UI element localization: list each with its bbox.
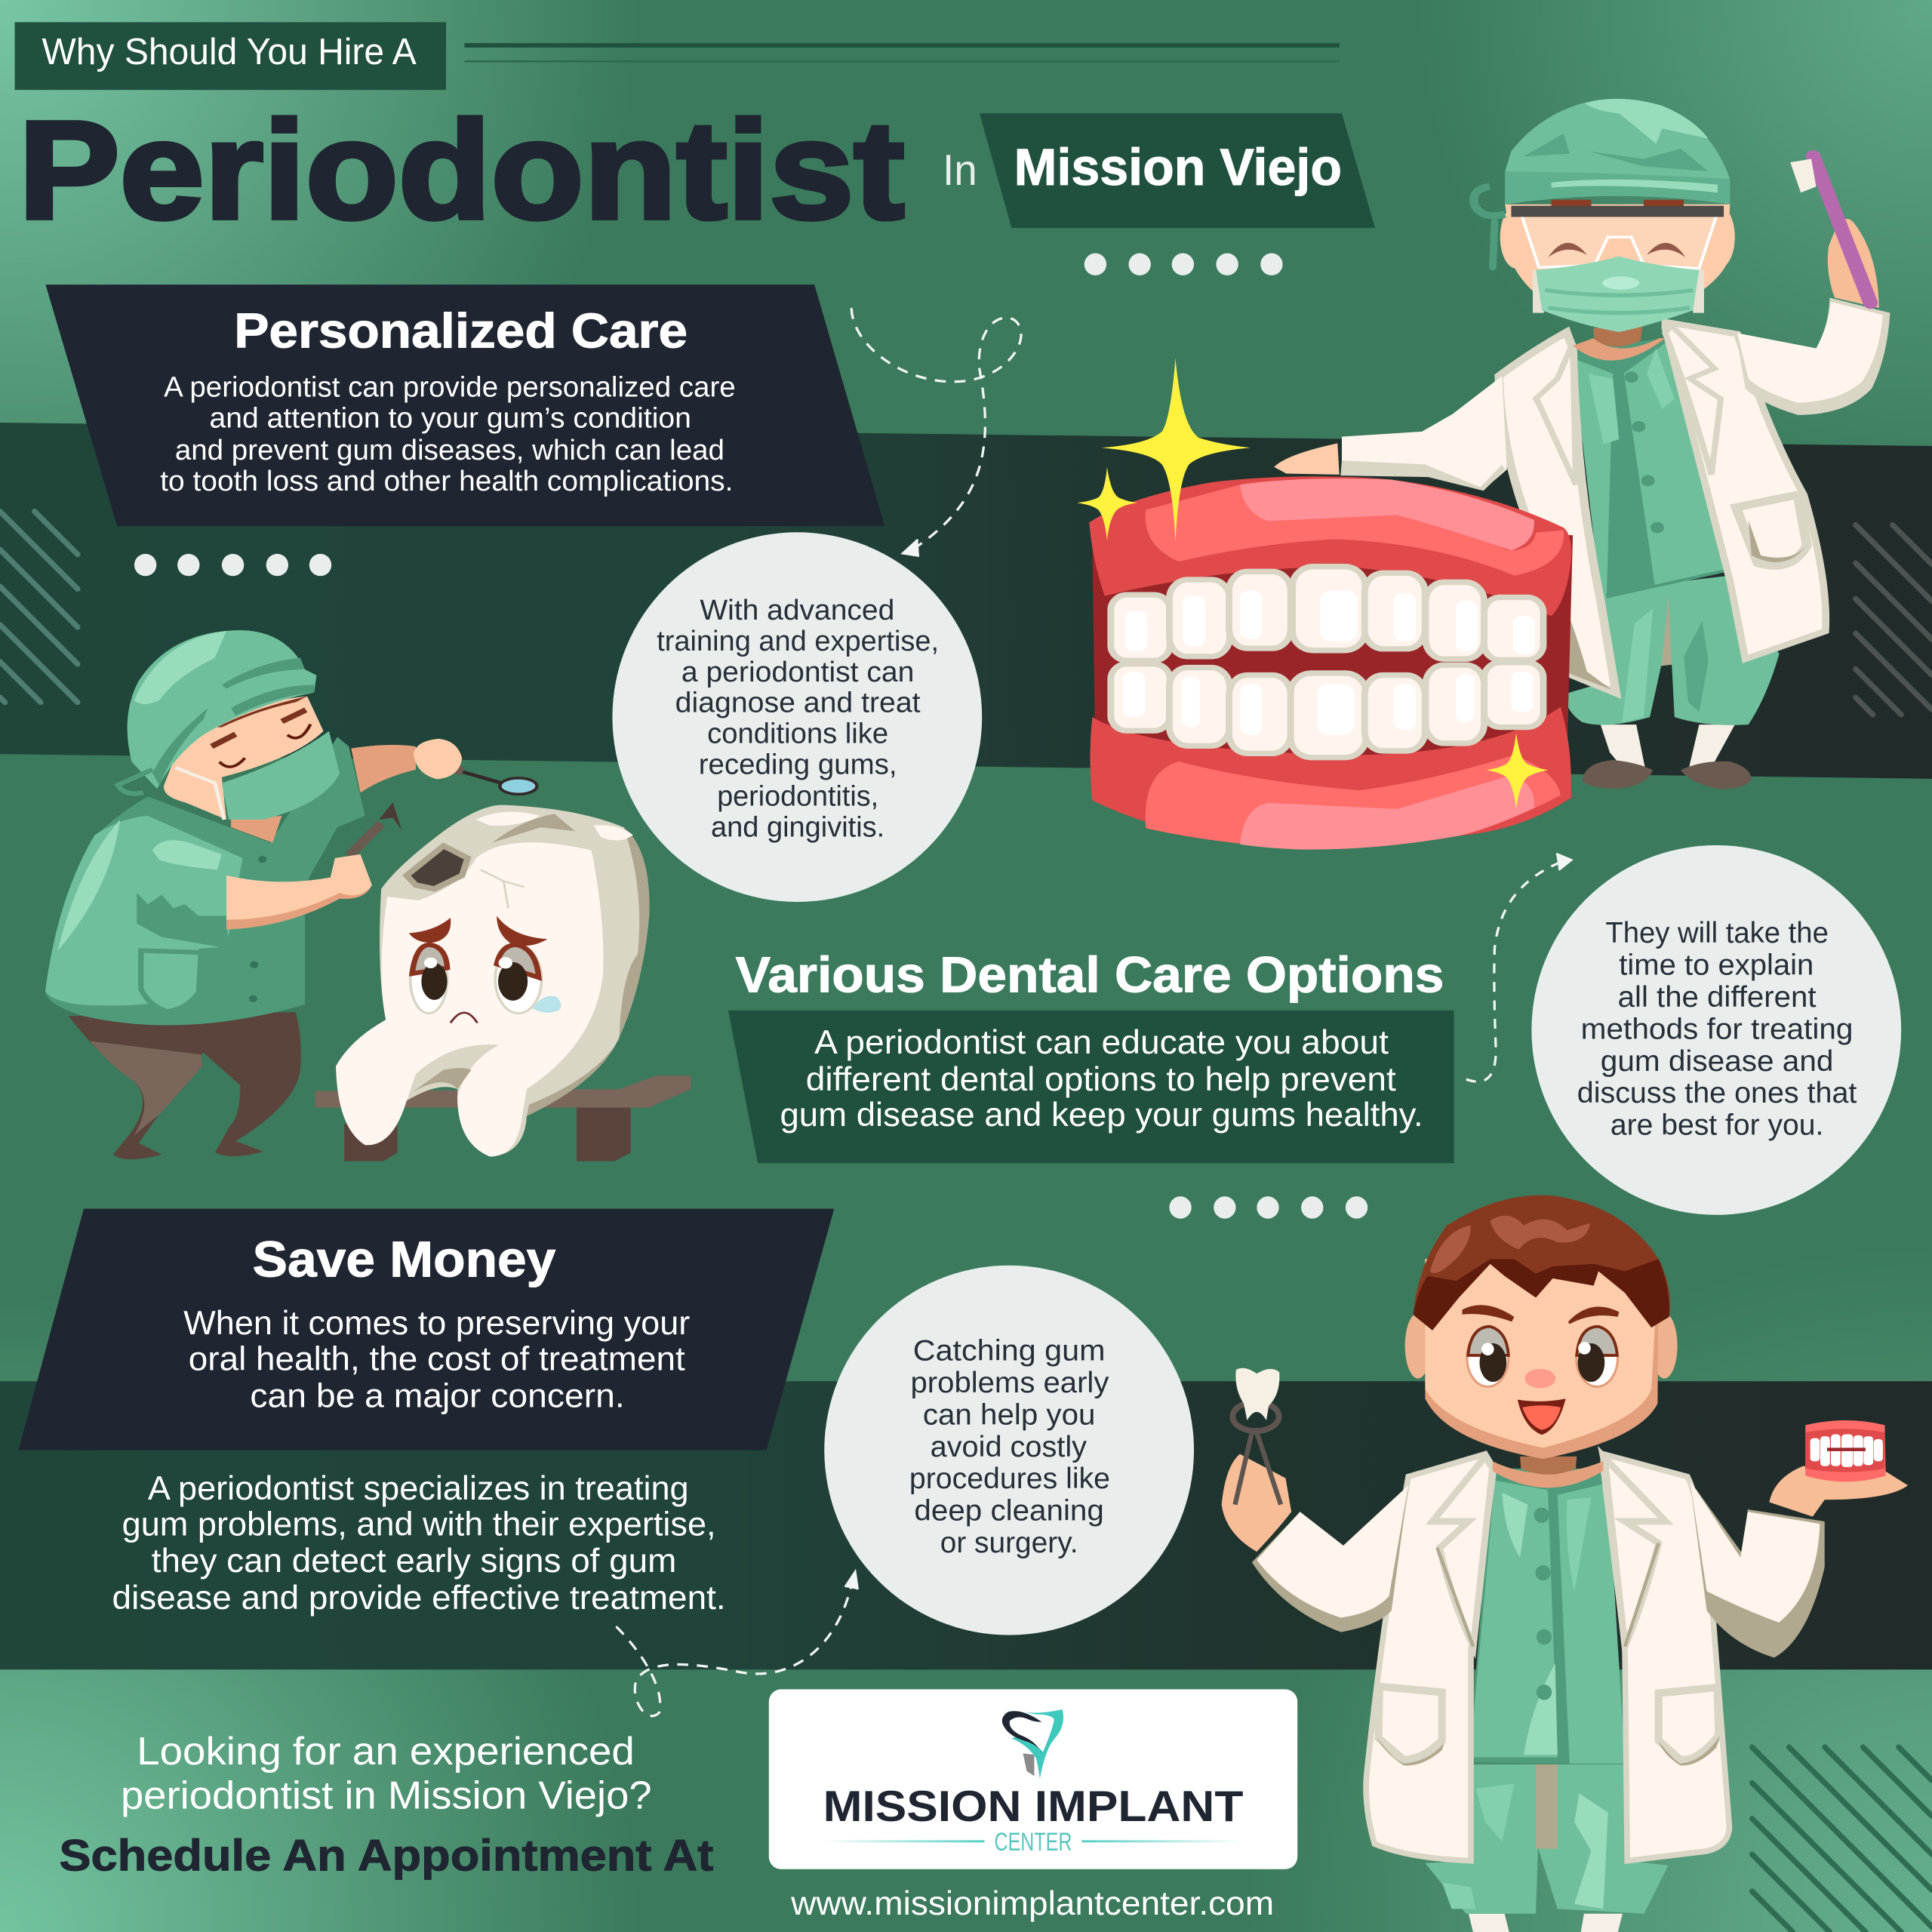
location banner: Mission Viejo — [980, 113, 1375, 228]
call to action: Looking for an experienced — [137, 1730, 635, 1774]
panel: Personalized Care — [45, 285, 884, 526]
scrubs — [1573, 338, 1733, 598]
head and face — [1405, 1195, 1678, 1487]
head with mask and cap — [118, 630, 340, 843]
arrow: dashed from personalized care to circle — [851, 308, 1021, 555]
logo card — [769, 1689, 1297, 1869]
website url: www.missionimplantcenter.com — [790, 1885, 1274, 1922]
circle: catching gum problems — [824, 1266, 1194, 1635]
circle: catching gum problems: can help you — [923, 1398, 1095, 1431]
circle: catching gum problems: avoid costly — [931, 1431, 1087, 1463]
circle: advanced training — [612, 532, 982, 902]
shoes and socks — [1582, 724, 1752, 789]
text: save money detail: disease and provide effective treatment. — [112, 1580, 726, 1617]
circle: catching gum problems: deep cleaning — [914, 1495, 1104, 1527]
illustration: masked dentist with toothbrush — [1274, 99, 1890, 789]
header label: Why Should You Hire A — [15, 22, 446, 90]
arrow: dashed to denture — [1466, 854, 1571, 1081]
circle: explain methods: gum disease and — [1601, 1045, 1833, 1078]
circle: explain methods: discuss the ones that — [1577, 1077, 1857, 1109]
circle: explain methods: all the different — [1618, 981, 1817, 1014]
dots: header — [1084, 254, 1283, 275]
circle: advanced training: a periodontist can — [681, 656, 914, 688]
circle: explain methods — [1531, 845, 1901, 1215]
text: personalized care body: A periodontist can provide personalized care — [164, 371, 736, 403]
text: save money detail: A periodontist specializes in treating — [148, 1470, 689, 1507]
call to action: Schedule An Appointment At — [59, 1831, 713, 1880]
circle: advanced training: With advanced — [700, 594, 894, 626]
text: personalized care body: and attention to your gum’s condition — [210, 402, 691, 434]
heading: Various Dental Care Options: Various Dental Care Options — [736, 946, 1444, 1003]
dots: personalized care — [134, 554, 331, 576]
right hand with mini dentures — [1769, 1420, 1908, 1517]
circle: advanced training: diagnose and treat — [675, 687, 921, 719]
scrubs with buttons — [1469, 1469, 1627, 1764]
circle: advanced training: conditions like — [707, 717, 888, 749]
text: save money detail: gum problems, and with their expertise, — [122, 1506, 716, 1543]
denture teeth — [1111, 567, 1543, 758]
panel: dental care options text — [728, 1011, 1454, 1163]
circle: advanced training: periodontitis, — [717, 780, 878, 813]
dots: dental options — [1169, 1196, 1367, 1219]
illustration: dentures with sparkles — [1077, 358, 1573, 850]
socks and trousers — [1425, 1764, 1668, 1932]
stool bench — [315, 1075, 691, 1161]
call to action: periodontist in Mission Viejo? — [121, 1774, 652, 1818]
trousers — [1564, 576, 1780, 725]
logo wordmark: MISSION IMPLANT — [823, 1783, 1243, 1831]
sad decayed tooth — [336, 805, 649, 1156]
circle: advanced training: training and expertise, — [657, 625, 939, 657]
circle: explain methods: are best for you. — [1611, 1109, 1823, 1142]
header label: Why Should You Hire A: Why Should You Hire A — [42, 32, 417, 72]
text: save money intro — [183, 1305, 690, 1414]
left hand with pliers and extracted tooth — [1222, 1368, 1291, 1552]
circle: catching gum problems: or surgery. — [940, 1527, 1078, 1559]
circle: explain methods: methods for treating — [1581, 1013, 1854, 1045]
circle: catching gum problems: procedures like — [909, 1463, 1110, 1495]
text: save money intro: oral health, the cost of treatment — [189, 1341, 685, 1378]
panel: dental care options text: A periodontist can educate you about — [814, 1024, 1389, 1061]
illustration: dentist examining sad tooth — [45, 630, 691, 1161]
circle: catching gum problems: problems early — [911, 1367, 1109, 1399]
panel: dental care options text: gum disease and keep your gums healthy. — [780, 1097, 1423, 1134]
circle: explain methods: time to explain — [1619, 949, 1814, 981]
sparkles — [1077, 358, 1548, 808]
text: save money intro: can be a major concern. — [250, 1377, 625, 1414]
scrub shirt — [45, 737, 365, 1025]
circle: advanced training: and gingivitis. — [711, 811, 884, 844]
location banner: Mission Viejo: Mission Viejo — [1014, 138, 1342, 196]
heading: Personalized Care: Personalized Care — [234, 303, 688, 358]
panel: Save Money — [18, 1209, 834, 1451]
text: save money detail — [112, 1470, 726, 1617]
call to action — [59, 1730, 713, 1880]
text: save money detail: they can detect early signs of gum — [152, 1543, 676, 1580]
hand and toothbrush — [1790, 156, 1879, 308]
head with surgical cap and mask — [1474, 99, 1735, 361]
label: In: In — [943, 146, 977, 195]
lab coat — [1252, 1454, 1825, 1861]
arrow: dashed to early detection circle — [616, 1572, 857, 1716]
icon: tooth implant logo — [1002, 1709, 1063, 1779]
panel: dental care options text: different dental options to help prevent — [806, 1061, 1396, 1098]
title: Periodontist: Periodontist — [18, 93, 904, 248]
heading: Save Money: Save Money — [253, 1231, 555, 1287]
circle: advanced training: receding gums, — [699, 748, 897, 780]
logo subtitle: CENTER — [995, 1828, 1072, 1857]
arms and tools — [226, 739, 537, 929]
text: personalized care body: and prevent gum diseases, which can lead — [175, 434, 724, 466]
text: personalized care body — [160, 371, 736, 497]
circle: catching gum problems: Catching gum — [913, 1334, 1105, 1367]
circle: explain methods: They will take the — [1605, 917, 1829, 949]
text: save money intro: When it comes to preserving your — [183, 1305, 690, 1342]
denture gums — [1089, 476, 1573, 850]
trousers and shoes — [69, 1012, 301, 1159]
text: personalized care body: to tooth loss and other health complications. — [160, 465, 733, 497]
lab coat — [1274, 298, 1890, 693]
illustration: young dentist with tooth and dentures — [1222, 1195, 1908, 1932]
